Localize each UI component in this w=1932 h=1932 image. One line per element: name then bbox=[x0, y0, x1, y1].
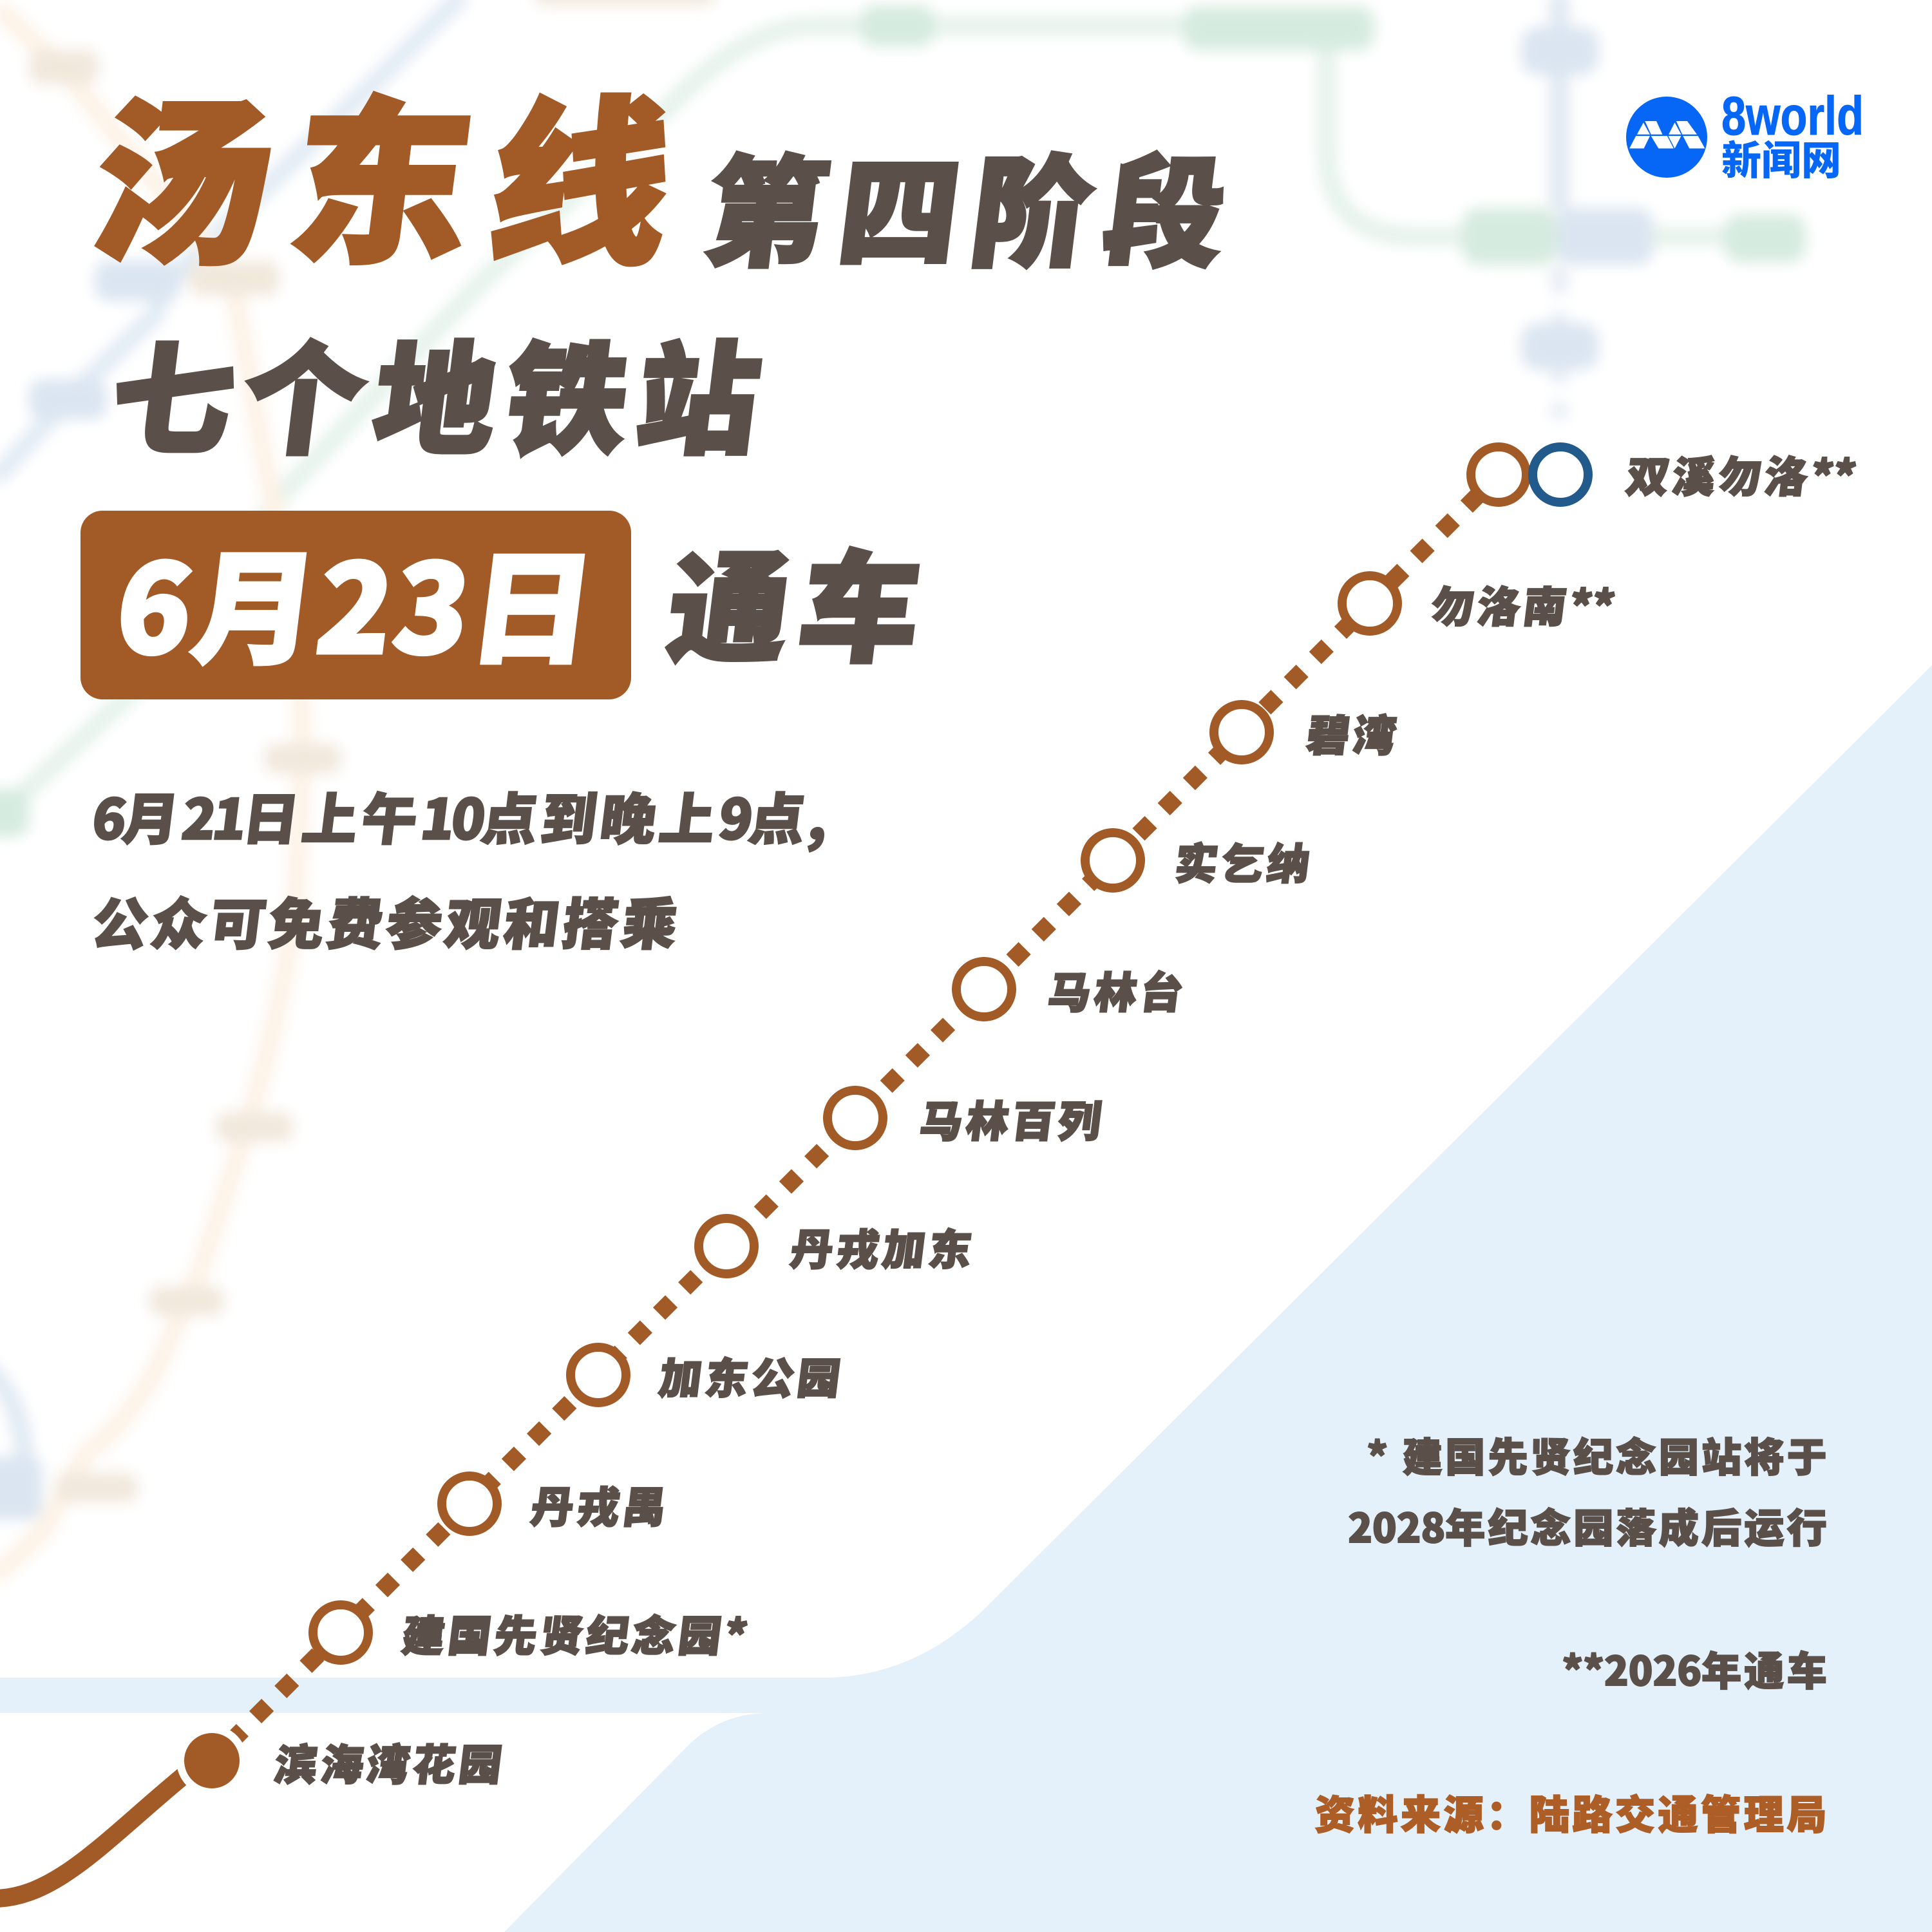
logo: 8world: 新闻网 bbox=[1721, 128, 1841, 186]
source line: 资料来源：陆路交通管理局 bbox=[1315, 1783, 1830, 1841]
blurred background metro map bbox=[0, 0, 1806, 1578]
footnote: memorial park station: 2028年纪念园落成后运行 bbox=[1348, 1496, 1830, 1554]
station: 双溪勿洛 interchange: 双溪勿洛** bbox=[1624, 443, 1860, 505]
station: 实乞纳 bbox=[1085, 830, 1318, 892]
station: 勿洛南 bbox=[1342, 573, 1619, 635]
open-day text bbox=[88, 775, 838, 960]
open-day text: 公众可免费参观和搭乘 bbox=[88, 880, 686, 960]
station: 马林百列 bbox=[828, 1088, 1108, 1150]
station: 马林台: 马林台 bbox=[1045, 959, 1191, 1021]
subtitle: 第四阶段: 第四阶段 bbox=[697, 118, 1249, 290]
heading: 通车: 通车 bbox=[660, 514, 943, 686]
metro line bbox=[0, 475, 1499, 1899]
station: 碧湾: 碧湾 bbox=[1304, 702, 1403, 764]
footnote: memorial park station: * 建国先贤纪念园站将于 bbox=[1367, 1425, 1830, 1483]
station: 滨海湾花园: 滨海湾花园 bbox=[272, 1731, 509, 1793]
station: 双溪勿洛 interchange bbox=[1471, 443, 1860, 505]
station: 马林台 bbox=[956, 959, 1191, 1021]
date badge: 6月23日 bbox=[108, 511, 607, 688]
station: 丹戎加东: 丹戎加东 bbox=[788, 1216, 979, 1278]
station: 加东公园: 加东公园 bbox=[656, 1345, 848, 1406]
logo: 8world bbox=[1626, 86, 1864, 186]
open-day text: 6月21日上午10点到晚上9点, bbox=[88, 775, 838, 855]
station: 丹戎禺: 丹戎禺 bbox=[528, 1473, 674, 1535]
pale blue background shape bbox=[0, 665, 1932, 1932]
footnote: memorial park station bbox=[1348, 1425, 1830, 1554]
station: 建国先贤纪念园: 建国先贤纪念园* bbox=[399, 1602, 752, 1664]
heading: 七个地铁站: 七个地铁站 bbox=[102, 303, 781, 478]
station: 加东公园 bbox=[571, 1345, 848, 1406]
title: 汤东线: 汤东线 bbox=[80, 43, 708, 299]
station: 实乞纳: 实乞纳 bbox=[1172, 830, 1318, 892]
station: 丹戎禺 bbox=[442, 1473, 674, 1535]
footnote: 2026 opening: **2026年通车 bbox=[1562, 1639, 1830, 1697]
station: 勿洛南: 勿洛南** bbox=[1428, 573, 1619, 635]
logo: 8world: 8world bbox=[1721, 86, 1864, 146]
station: 马林百列: 马林百列 bbox=[917, 1088, 1108, 1150]
station: 碧湾 bbox=[1214, 702, 1403, 764]
station: 丹戎加东 bbox=[699, 1216, 979, 1278]
